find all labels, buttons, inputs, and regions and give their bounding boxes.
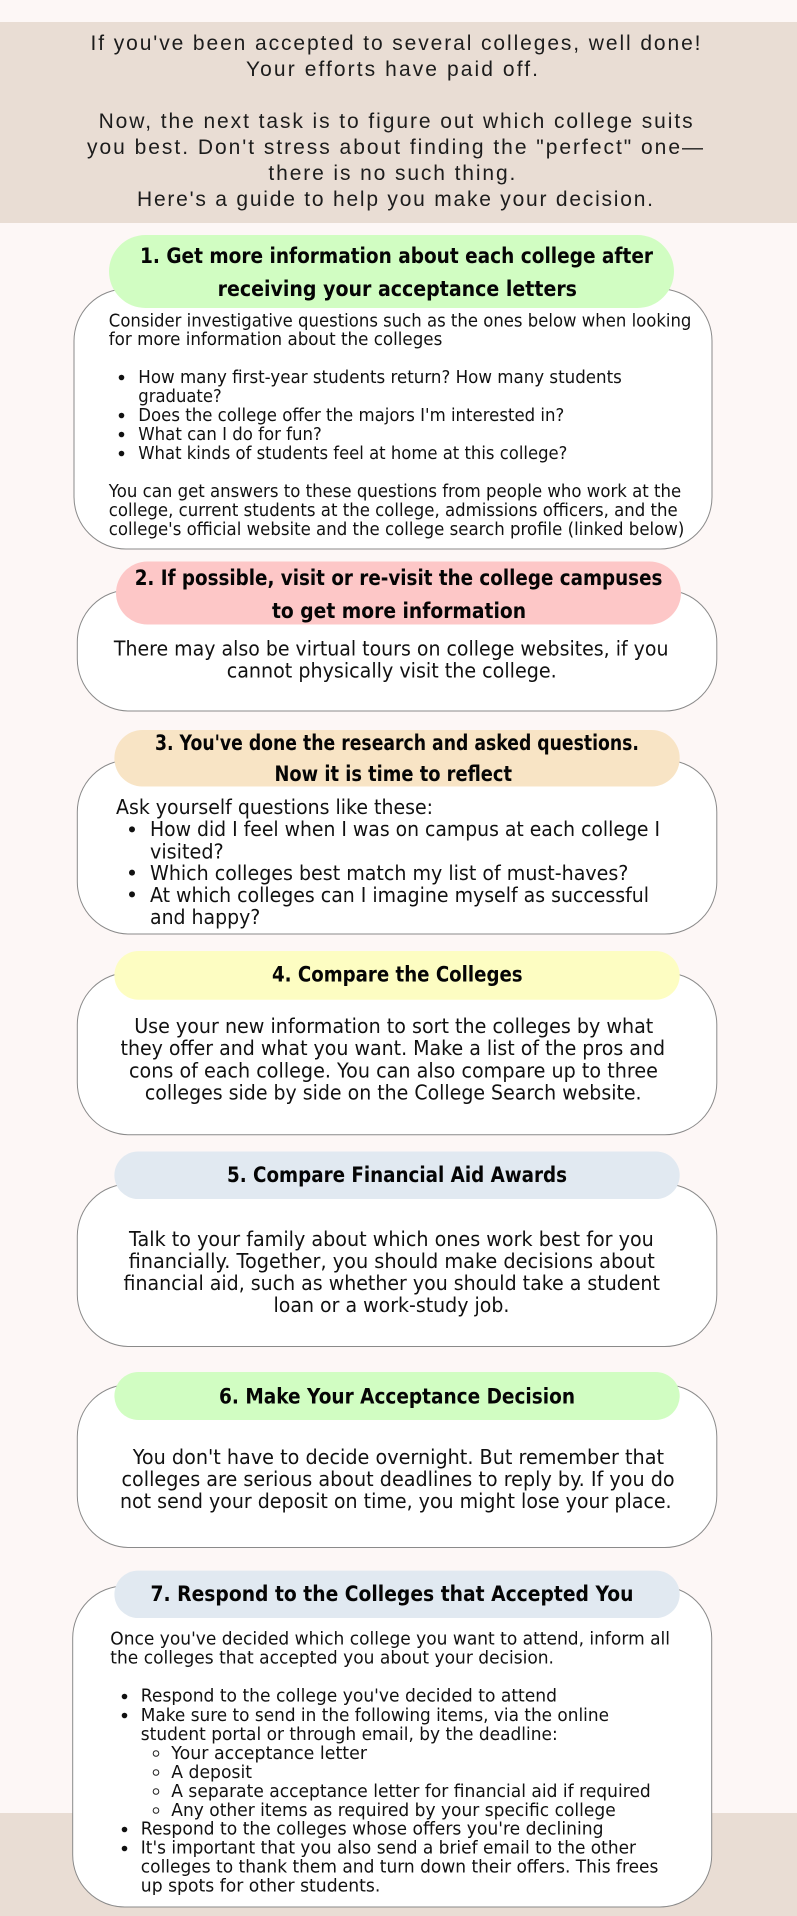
heading: step 5	[114, 1152, 680, 1199]
heading: step 1: 1. Get more information about each college after	[140, 244, 654, 268]
panel: step 7	[73, 1571, 712, 1907]
text: step 7 body: Any other items as required by your specific college	[171, 1801, 616, 1821]
text: step 2 body	[113, 636, 669, 683]
text: step 7 body: Make sure to send in the following items, via the online	[141, 1706, 609, 1726]
text: step 6 body	[120, 1445, 675, 1513]
text: step 1 body: Consider investigative questions such as the ones below when looking	[109, 311, 691, 331]
text: step 3 body: At which colleges can I imagine myself as successful	[150, 883, 649, 907]
heading: step 6: 6. Make Your Acceptance Decision	[219, 1384, 575, 1408]
heading: step 7	[114, 1571, 680, 1618]
text: step 3 body: How did I feel when I was on campus at each college I	[150, 817, 660, 841]
heading: step 3	[114, 730, 680, 786]
text: step 7 body: It's important that you also send a brief email to the other	[141, 1839, 637, 1859]
text: step 4 body	[120, 1014, 665, 1105]
panel: step 1	[74, 235, 712, 549]
text: step 7 body: student portal or through email, by the deadline:	[141, 1725, 558, 1745]
text: step 6 body: colleges are serious about deadlines to reply by. If you do	[122, 1467, 675, 1491]
panel: step 3	[77, 730, 717, 934]
panel: step 6	[77, 1372, 717, 1548]
intro panel: Here's a guide to help you make your decision.	[137, 188, 653, 211]
heading: step 2: 2. If possible, visit or re-visit the college campuses	[135, 566, 662, 590]
intro panel	[0, 22, 797, 223]
text: step 7 body: A deposit	[171, 1763, 252, 1783]
text: step 1 body: for more information about the colleges	[109, 330, 442, 350]
text: step 4 body: Use your new information to sort the colleges by what	[134, 1014, 653, 1038]
text: step 5 body: Talk to your family about which ones work best for you	[128, 1227, 654, 1251]
intro panel: there is no such thing.	[268, 162, 515, 185]
heading: step 7: 7. Respond to the Colleges that Accepted You	[150, 1582, 634, 1606]
text: step 3 body: Ask yourself questions like these:	[116, 795, 433, 819]
text: step 7 body: A separate acceptance letter for financial aid if required	[171, 1782, 651, 1802]
text: step 6 body: not send your deposit on time, you might lose your place.	[120, 1489, 672, 1513]
panel: step 2	[77, 562, 717, 711]
text: step 1 body: college, current students at the college, admissions officers, and the	[109, 501, 678, 521]
text: step 1 body: Does the college offer the majors I'm interested in?	[138, 406, 564, 426]
heading: step 6	[114, 1372, 680, 1420]
heading: step 3: Now it is time to reflect	[274, 762, 512, 786]
text: step 3 body: Which colleges best match my list of must-haves?	[150, 861, 628, 885]
text: step 5 body	[124, 1227, 660, 1317]
text: step 5 body: financially. Together, you should make decisions about	[129, 1249, 655, 1273]
text: step 7 body: Respond to the colleges whose offers you're declining	[141, 1820, 604, 1840]
text: step 5 body: loan or a work-study job.	[274, 1293, 509, 1317]
text: step 3 body: visited?	[150, 840, 224, 864]
intro panel: If you've been accepted to several colleges, well done!	[90, 32, 700, 55]
text: step 7 body: up spots for other students.	[141, 1877, 380, 1897]
text: step 7 body: Your acceptance letter	[170, 1744, 368, 1764]
text: step 5 body: financial aid, such as whether you should take a student	[124, 1271, 660, 1295]
text: step 1 body: college's official website and the college search profile (linked below)	[109, 520, 684, 540]
text: step 1 body: How many first-year students return? How many students	[138, 368, 622, 388]
intro panel: Your efforts have paid off.	[246, 58, 538, 81]
heading: step 3: 3. You've done the research and asked questions.	[155, 731, 639, 755]
text: step 4 body: they offer and what you want. Make a list of the pros and	[120, 1036, 665, 1060]
heading: step 2	[116, 562, 681, 624]
text: step 6 body: You don't have to decide overnight. But remember that	[132, 1445, 664, 1469]
intro panel: you best. Don't stress about finding the "perfect" one—	[87, 136, 703, 159]
text: step 2 body: There may also be virtual tours on college websites, if you	[113, 636, 669, 660]
panel: step 4	[77, 951, 717, 1135]
heading: step 1: receiving your acceptance letters	[218, 277, 577, 301]
text: step 1 body: What kinds of students feel at home at this college?	[138, 444, 567, 464]
heading: step 5: 5. Compare Financial Aid Awards	[227, 1163, 567, 1187]
heading: step 4	[114, 951, 680, 1000]
text: step 7 body: Once you've decided which college you want to attend, inform all	[110, 1630, 670, 1650]
text: step 1 body: You can get answers to these questions from people who work at the	[108, 482, 681, 502]
text: step 2 body: cannot physically visit the college.	[227, 659, 557, 683]
text: step 1 body	[108, 311, 691, 540]
intro panel: Now, the next task is to figure out which college suits	[99, 110, 693, 133]
heading: step 2: to get more information	[272, 599, 526, 623]
text: step 4 body: cons of each college. You can also compare up to three	[129, 1058, 658, 1082]
text: step 7 body	[110, 1630, 670, 1897]
text: step 1 body: graduate?	[138, 387, 222, 407]
heading: step 4: 4. Compare the Colleges	[272, 963, 523, 987]
text: step 7 body: the colleges that accepted you about your decision.	[110, 1649, 554, 1669]
text: step 7 body: colleges to thank them and turn down their offers. This frees	[141, 1858, 658, 1878]
text: step 1 body: What can I do for fun?	[138, 425, 322, 445]
text: step 7 body: Respond to the college you've decided to attend	[141, 1687, 557, 1707]
panel: step 5	[77, 1152, 717, 1346]
text: step 4 body: colleges side by side on the College Search website.	[145, 1081, 642, 1105]
text: step 3 body: and happy?	[150, 905, 260, 929]
text: step 3 body	[116, 795, 660, 929]
heading: step 1	[109, 235, 674, 308]
